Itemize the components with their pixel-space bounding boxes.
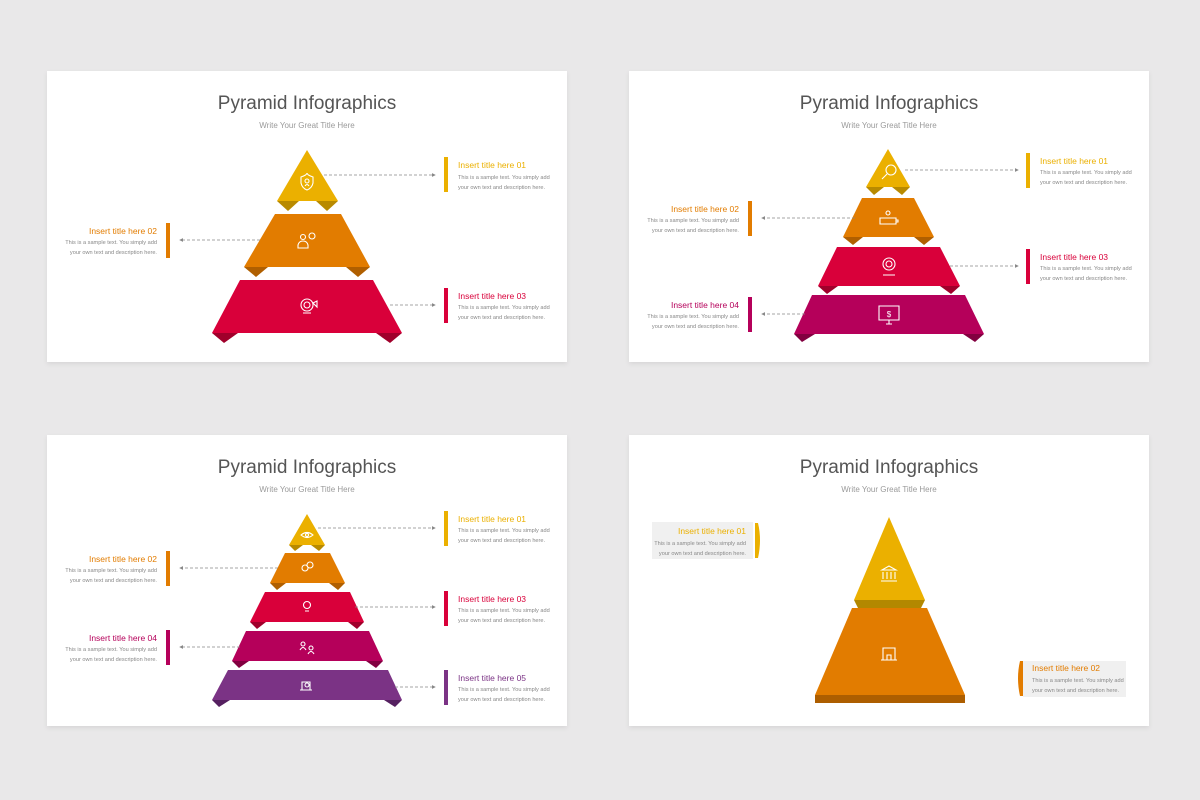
title: Pyramid Infographics: [800, 457, 978, 478]
item 04: Insert title here 04: [89, 633, 157, 643]
item 03: This is a sample text. You simply add: [1040, 266, 1132, 272]
item 05: [395, 670, 550, 705]
item 02: Insert title here 02: [89, 554, 157, 564]
item 02: This is a sample text. You simply add: [1032, 678, 1124, 684]
item 03: your own text and description here.: [1040, 276, 1128, 282]
item 02: Insert title here 02: [89, 226, 157, 236]
item 01: your own text and description here.: [458, 185, 546, 191]
title: Pyramid Infographics: [800, 93, 978, 114]
item 03: Insert title here 03: [458, 594, 526, 604]
subtitle: Write Your Great Title Here: [259, 121, 355, 130]
item 03: [390, 288, 550, 323]
item 03: This is a sample text. You simply add: [458, 608, 550, 614]
subtitle: Write Your Great Title Here: [259, 485, 355, 494]
item 02: [65, 551, 278, 586]
item 01: [324, 157, 550, 192]
pyramid: $: [887, 310, 892, 319]
item 04: your own text and description here.: [70, 657, 157, 663]
item 03: Insert title here 03: [458, 291, 526, 301]
item 02: This is a sample text. You simply add: [647, 218, 739, 224]
subtitle: Write Your Great Title Here: [841, 121, 937, 130]
item 03: Insert title here 03: [1040, 252, 1108, 262]
panel: slide 4 two-level pyramid: [629, 435, 1149, 726]
item 01: your own text and description here.: [458, 538, 546, 544]
pyramid: [815, 517, 965, 703]
title: Pyramid Infographics: [218, 93, 396, 114]
item 04: [65, 630, 240, 665]
item 04: [647, 297, 805, 332]
item 01: This is a sample text. You simply add: [458, 528, 550, 534]
item 02: [1018, 661, 1126, 697]
item 03: your own text and description here.: [458, 618, 546, 624]
item 01: Insert title here 01: [458, 160, 526, 170]
item 04: Insert title here 04: [671, 300, 739, 310]
item 02: your own text and description here.: [70, 250, 157, 256]
title: Pyramid Infographics: [218, 457, 396, 478]
item 01: your own text and description here.: [1040, 180, 1128, 186]
panel: slide 1 three-level pyramid: [47, 71, 567, 362]
item 05: your own text and description here.: [458, 697, 546, 703]
panel: slide 3 five-level pyramid: [47, 435, 567, 726]
item 01: [318, 511, 550, 546]
pyramid: [794, 149, 984, 342]
subtitle: Write Your Great Title Here: [841, 485, 937, 494]
item 01: This is a sample text. You simply add: [1040, 170, 1132, 176]
item 01: Insert title here 01: [678, 526, 746, 536]
item 04: This is a sample text. You simply add: [647, 314, 739, 320]
item 04: your own text and description here.: [652, 324, 739, 330]
panel: slide 2 four-level pyramid: [629, 71, 1149, 362]
item 01: This is a sample text. You simply add: [654, 541, 746, 547]
pyramid: [212, 514, 402, 707]
item 02: [65, 223, 260, 258]
item 02: your own text and description here.: [70, 578, 157, 584]
item 01: [652, 522, 760, 559]
item 01: Insert title here 01: [1040, 156, 1108, 166]
item 01: This is a sample text. You simply add: [458, 175, 550, 181]
pyramid: [212, 150, 402, 343]
item 02: Insert title here 02: [1032, 663, 1100, 673]
item 02: [647, 201, 855, 236]
item 01: [905, 153, 1132, 188]
item 01: Insert title here 01: [458, 514, 526, 524]
item 05: This is a sample text. You simply add: [458, 687, 550, 693]
item 02: your own text and description here.: [1032, 688, 1120, 694]
item 01: your own text and description here.: [659, 551, 746, 557]
item 02: your own text and description here.: [652, 228, 739, 234]
item 03: your own text and description here.: [458, 315, 546, 321]
item 03: [950, 249, 1132, 284]
item 03: This is a sample text. You simply add: [458, 305, 550, 311]
item 03: [355, 591, 550, 626]
item 05: Insert title here 05: [458, 673, 526, 683]
item 04: This is a sample text. You simply add: [65, 647, 157, 653]
item 02: This is a sample text. You simply add: [65, 568, 157, 574]
item 02: Insert title here 02: [671, 204, 739, 214]
item 02: This is a sample text. You simply add: [65, 240, 157, 246]
